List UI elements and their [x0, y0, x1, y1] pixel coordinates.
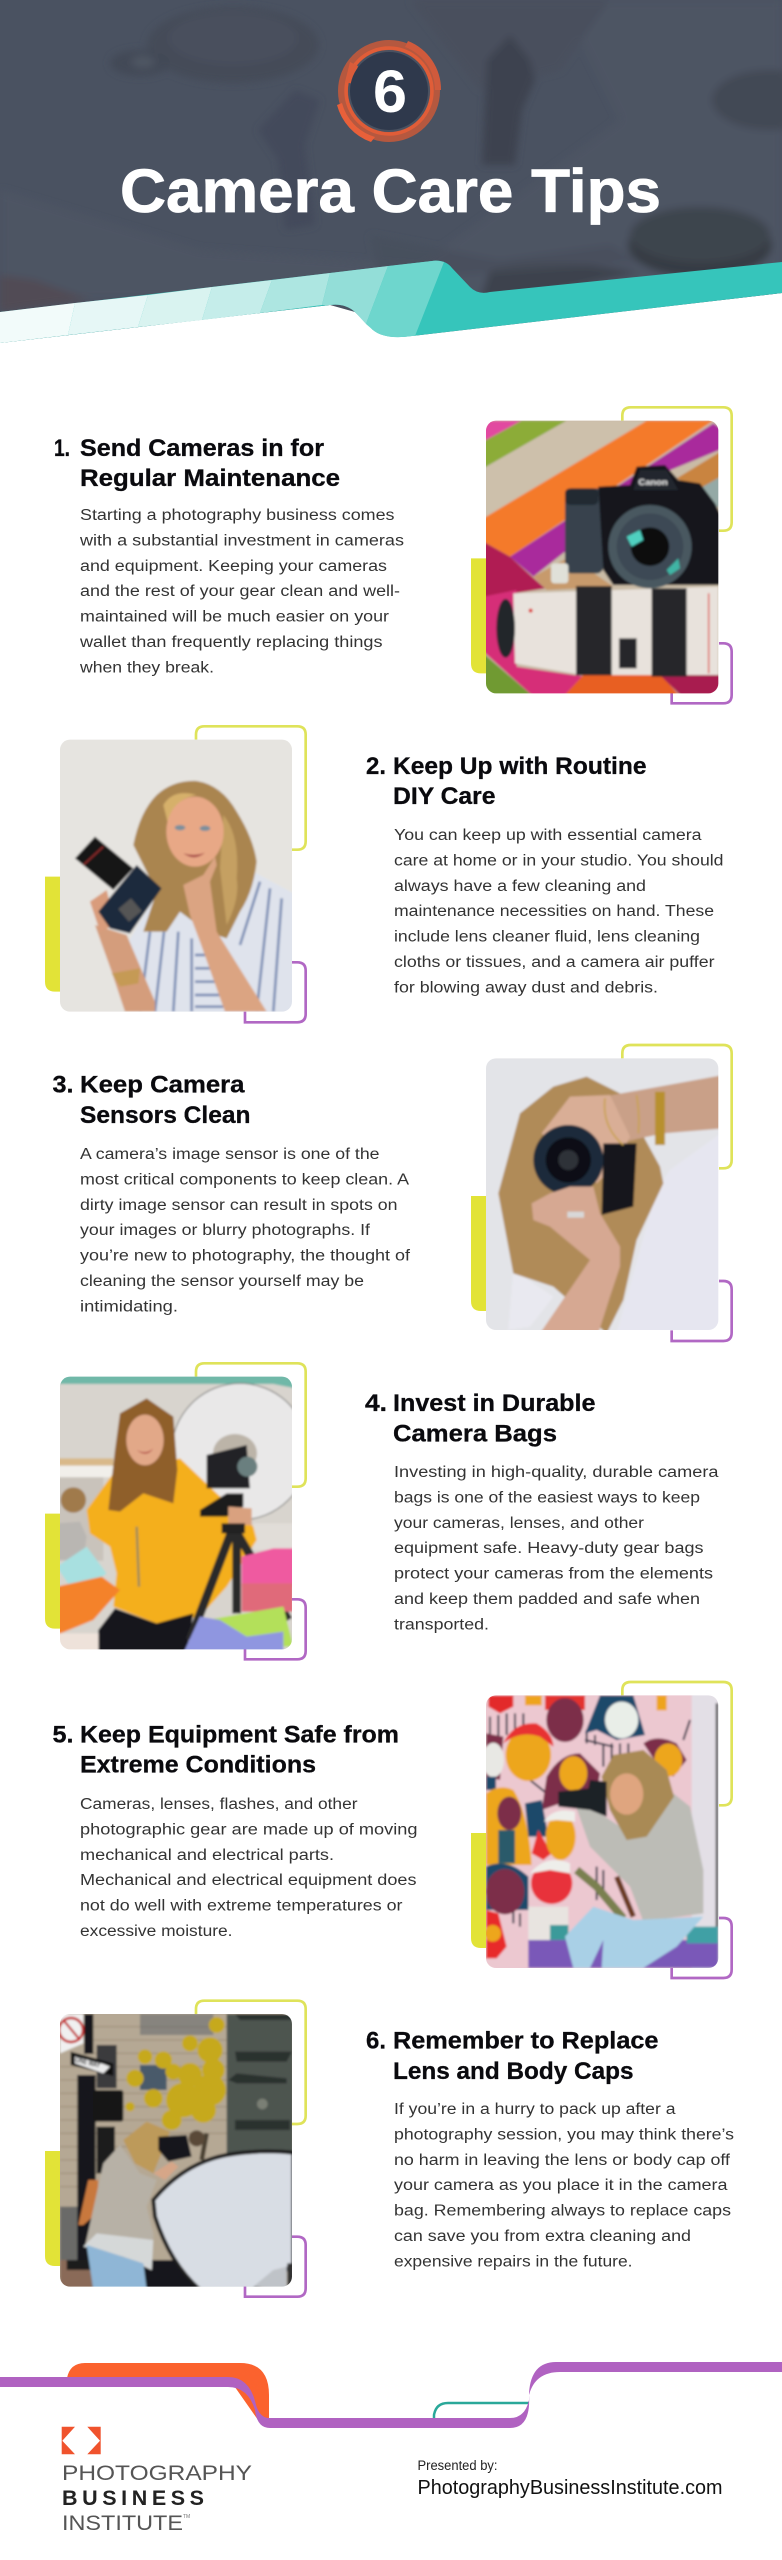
- teal ribbon: [0, 261, 782, 343]
- image: photographer on street with reflector: ONE WAY: [75, 2055, 102, 2070]
- text block: tip 4: protect your cameras from the elements: [394, 1566, 713, 1583]
- heading: tip 6: Remember to Replace: [393, 2028, 658, 2055]
- text block: tip 4: your cameras, lenses, and other: [394, 1515, 644, 1532]
- text block: tip 2: maintenance necessities on hand. These: [394, 903, 714, 920]
- text block: tip 3: intimidating.: [80, 1298, 178, 1315]
- heading: tip 6: 6.: [366, 2028, 386, 2055]
- text block: tip 5: mechanical and electrical parts.: [80, 1847, 334, 1864]
- text block: tip 6: photography session, you may think there’s: [394, 2126, 734, 2143]
- text block: tip 3: most critical components to keep clean. A: [80, 1171, 410, 1188]
- text block: tip 2: [394, 827, 724, 996]
- heading: tip 3: Sensors Clean: [80, 1102, 250, 1129]
- text block: tip 2: include lens cleaner fluid, lens cleaning: [394, 929, 700, 946]
- logo wordmark: BUSINESS: [62, 2486, 204, 2510]
- logo wordmark: PHOTOGRAPHY: [62, 2461, 252, 2485]
- image: photographer at mural: [471, 1682, 732, 1978]
- text block: tip 3: dirty image sensor can result in spots on: [80, 1197, 398, 1214]
- text block: tip 4: and keep them padded and safe when: [394, 1591, 700, 1608]
- panel: tip 1: [54, 407, 732, 703]
- text block: tip 1: wallet than frequently replacing things: [79, 634, 383, 651]
- image: woman aiming camera: [471, 1045, 732, 1341]
- presented by: PhotographyBusinessInstitute.com: [418, 2477, 722, 2499]
- image: photographer on street with reflector: [45, 2001, 306, 2297]
- heading: tip 1: [54, 435, 340, 492]
- text block: tip 2: cloths or tissues, and a camera air puffer: [394, 954, 714, 971]
- text block: tip 6: [394, 2101, 734, 2270]
- text block: tip 3: cleaning the sensor yourself may be: [80, 1273, 364, 1290]
- text block: tip 4: equipment safe. Heavy-duty gear bags: [394, 1540, 704, 1557]
- heading: tip 5: Extreme Conditions: [80, 1752, 316, 1779]
- image: cameras on striped rug: [471, 407, 732, 703]
- text block: tip 1: [79, 507, 404, 676]
- text block: tip 6: If you’re in a hurry to pack up after a: [394, 2101, 676, 2118]
- footer ribbons: [0, 2362, 782, 2428]
- logo: Photography Business Institute: [62, 2427, 252, 2535]
- text block: tip 5: Mechanical and electrical equipment does: [80, 1872, 417, 1889]
- title: Camera Care Tips: [120, 157, 661, 225]
- text block: tip 1: and equipment. Keeping your cameras: [80, 558, 387, 575]
- panel: tip 4: [45, 1363, 719, 1659]
- text block: tip 2: You can keep up with essential camera: [394, 827, 702, 844]
- text block: tip 2: care at home or in your studio. You should: [394, 852, 724, 869]
- logo wordmark: INSTITUTE: [62, 2511, 183, 2535]
- heading: tip 3: Keep Camera: [80, 1072, 245, 1099]
- heading: tip 1: Regular Maintenance: [80, 465, 340, 492]
- text block: tip 2: always have a few cleaning and: [394, 878, 646, 895]
- text block: tip 4: [394, 1464, 719, 1633]
- text block: tip 5: photographic gear are made up of moving: [80, 1821, 418, 1838]
- heading: tip 4: [365, 1390, 596, 1448]
- panel: tip 5: [52, 1682, 732, 1978]
- image: woman holding camera: [45, 726, 306, 1022]
- text block: tip 1: Starting a photography business comes: [80, 507, 395, 524]
- teal line: [434, 2403, 529, 2419]
- text block: tip 1: when they break.: [79, 659, 214, 676]
- presented by: [418, 2458, 722, 2499]
- text block: tip 1: maintained will be much easier on your: [80, 609, 389, 626]
- header background photo: [0, 0, 782, 345]
- text block: tip 6: your camera as you place it in the camera: [394, 2177, 728, 2194]
- text block: tip 6: expensive repairs in the future.: [394, 2253, 632, 2270]
- heading: tip 5: [52, 1721, 399, 1779]
- text block: tip 5: excessive moisture.: [80, 1923, 232, 1940]
- panel: tip 3: [52, 1045, 732, 1341]
- text block: tip 4: transported.: [394, 1616, 489, 1633]
- purple ribbon: [0, 2362, 782, 2428]
- text block: tip 1: with a substantial investment in cameras: [79, 532, 404, 549]
- logo wordmark: TM: [183, 2514, 190, 2520]
- heading: tip 2: 2.: [366, 753, 386, 780]
- text block: tip 5: [80, 1796, 418, 1940]
- text block: tip 3: your images or blurry photographs. If: [80, 1222, 371, 1239]
- heading: tip 5: 5.: [52, 1721, 74, 1748]
- number badge: 6: [373, 58, 407, 125]
- image: cameras on striped rug: Canon: [638, 478, 668, 487]
- heading: tip 6: [366, 2028, 658, 2085]
- text block: tip 6: bag. Remembering always to replace caps: [394, 2203, 731, 2220]
- number badge: [337, 41, 441, 142]
- heading: tip 6: Lens and Body Caps: [393, 2058, 634, 2085]
- text block: tip 6: can save you from extra cleaning and: [394, 2228, 691, 2245]
- text block: tip 3: A camera’s image sensor is one of the: [80, 1146, 380, 1163]
- heading: tip 4: Invest in Durable: [393, 1390, 596, 1417]
- orange ribbon: [67, 2363, 269, 2420]
- heading: tip 2: [366, 753, 646, 810]
- panel: tip 6: [45, 2001, 734, 2297]
- heading: tip 1: 1.: [54, 435, 70, 462]
- heading: tip 3: [52, 1072, 250, 1129]
- heading: tip 4: Camera Bags: [393, 1421, 557, 1448]
- heading: tip 5: Keep Equipment Safe from: [80, 1721, 399, 1748]
- text block: tip 6: no harm in leaving the lens or body cap off: [394, 2152, 731, 2169]
- panel: tip 2: [45, 726, 724, 1022]
- text block: tip 3: [80, 1146, 411, 1315]
- header panel: [0, 0, 782, 345]
- heading: tip 2: Keep Up with Routine: [393, 753, 646, 780]
- heading: tip 1: Send Cameras in for: [80, 435, 324, 462]
- heading: tip 2: DIY Care: [393, 783, 496, 810]
- text block: tip 2: for blowing away dust and debris.: [394, 979, 658, 996]
- heading: tip 3: 3.: [52, 1072, 74, 1099]
- heading: tip 4: 4.: [365, 1390, 387, 1417]
- text block: tip 5: not do well with extreme temperatures or: [80, 1898, 402, 1915]
- presented by: Presented by:: [418, 2458, 498, 2473]
- image: woman in yellow with tripod: [45, 1363, 308, 1659]
- text block: tip 4: bags is one of the easiest ways to keep: [394, 1489, 700, 1506]
- icon: logo mark: [62, 2427, 101, 2454]
- text block: tip 4: Investing in high-quality, durable camera: [394, 1464, 719, 1481]
- text block: tip 3: you’re new to photography, the thought of: [80, 1248, 411, 1265]
- text block: tip 1: and the rest of your gear clean and well-: [80, 583, 400, 600]
- text block: tip 5: Cameras, lenses, flashes, and other: [80, 1796, 358, 1813]
- logo wordmark: [62, 2461, 252, 2535]
